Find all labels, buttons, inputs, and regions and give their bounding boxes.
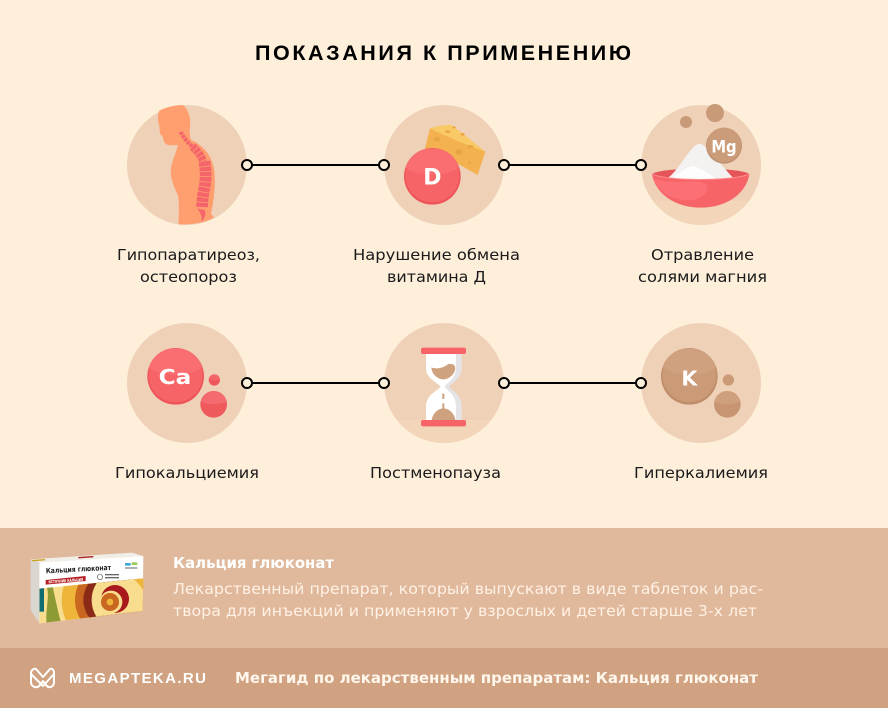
icon: hourglass	[384, 323, 504, 444]
label: Гиперкалиемия	[634, 464, 768, 482]
panel: hypoparathyroidism	[117, 105, 260, 286]
footer	[0, 648, 888, 708]
panel: hypocalcemia	[115, 323, 259, 482]
icon: bowl with magnesium salt: Mg	[711, 137, 737, 156]
label: Гипокальциемия	[115, 464, 259, 482]
label: витамина Д	[387, 268, 486, 286]
label: Отравление	[651, 246, 754, 264]
panel: magnesium poisoning	[638, 104, 767, 286]
panel: vitamin D	[353, 105, 520, 286]
logo icon	[31, 669, 54, 687]
panel: postmenopause	[370, 323, 504, 482]
title: ПОКАЗАНИЯ К ПРИМЕНЕНИЮ	[255, 41, 631, 65]
icon: human spine	[127, 105, 247, 225]
connector 3	[242, 378, 389, 388]
label: Нарушение обмена	[353, 246, 520, 264]
brand name: MEGAPTEKA.RU	[69, 670, 206, 687]
label	[353, 246, 520, 286]
label: Постменопауза	[370, 464, 501, 482]
connector 1	[242, 160, 389, 170]
drug box: ИСТОЧНИК КАЛЬЦИЯ	[48, 577, 83, 584]
icon: calcium spheres: Ca	[159, 365, 191, 389]
icon: calcium spheres	[127, 323, 247, 443]
label: остеопороз	[140, 268, 237, 286]
description: Лекарственный препарат, который выпускают в виде таблеток и рас-	[173, 580, 763, 598]
drug box: Кальция глюконат	[46, 563, 112, 575]
connector 4	[499, 378, 646, 388]
icon: potassium spheres	[641, 323, 761, 443]
drug name: Кальция глюконат	[173, 554, 334, 572]
connector 2	[499, 160, 646, 170]
label: Гипопаратиреоз,	[117, 246, 260, 264]
drug box	[30, 552, 144, 624]
footer text: Мегагид по лекарственным препаратам: Кальция глюконат	[235, 669, 758, 687]
icon: bowl with magnesium salt	[641, 104, 761, 231]
label	[638, 246, 767, 286]
panel: drug description	[0, 528, 888, 650]
label: солями магния	[638, 268, 767, 286]
icon: cheese and vitamin D: D	[423, 165, 441, 190]
label	[117, 246, 260, 286]
icon: cheese and vitamin D	[384, 105, 504, 225]
panel: hyperkalemia	[634, 323, 768, 482]
description: твора для инъекций и применяют у взрослых и детей старше 3-х лет	[173, 602, 757, 620]
description	[173, 580, 763, 620]
icon: potassium spheres: K	[681, 366, 698, 390]
